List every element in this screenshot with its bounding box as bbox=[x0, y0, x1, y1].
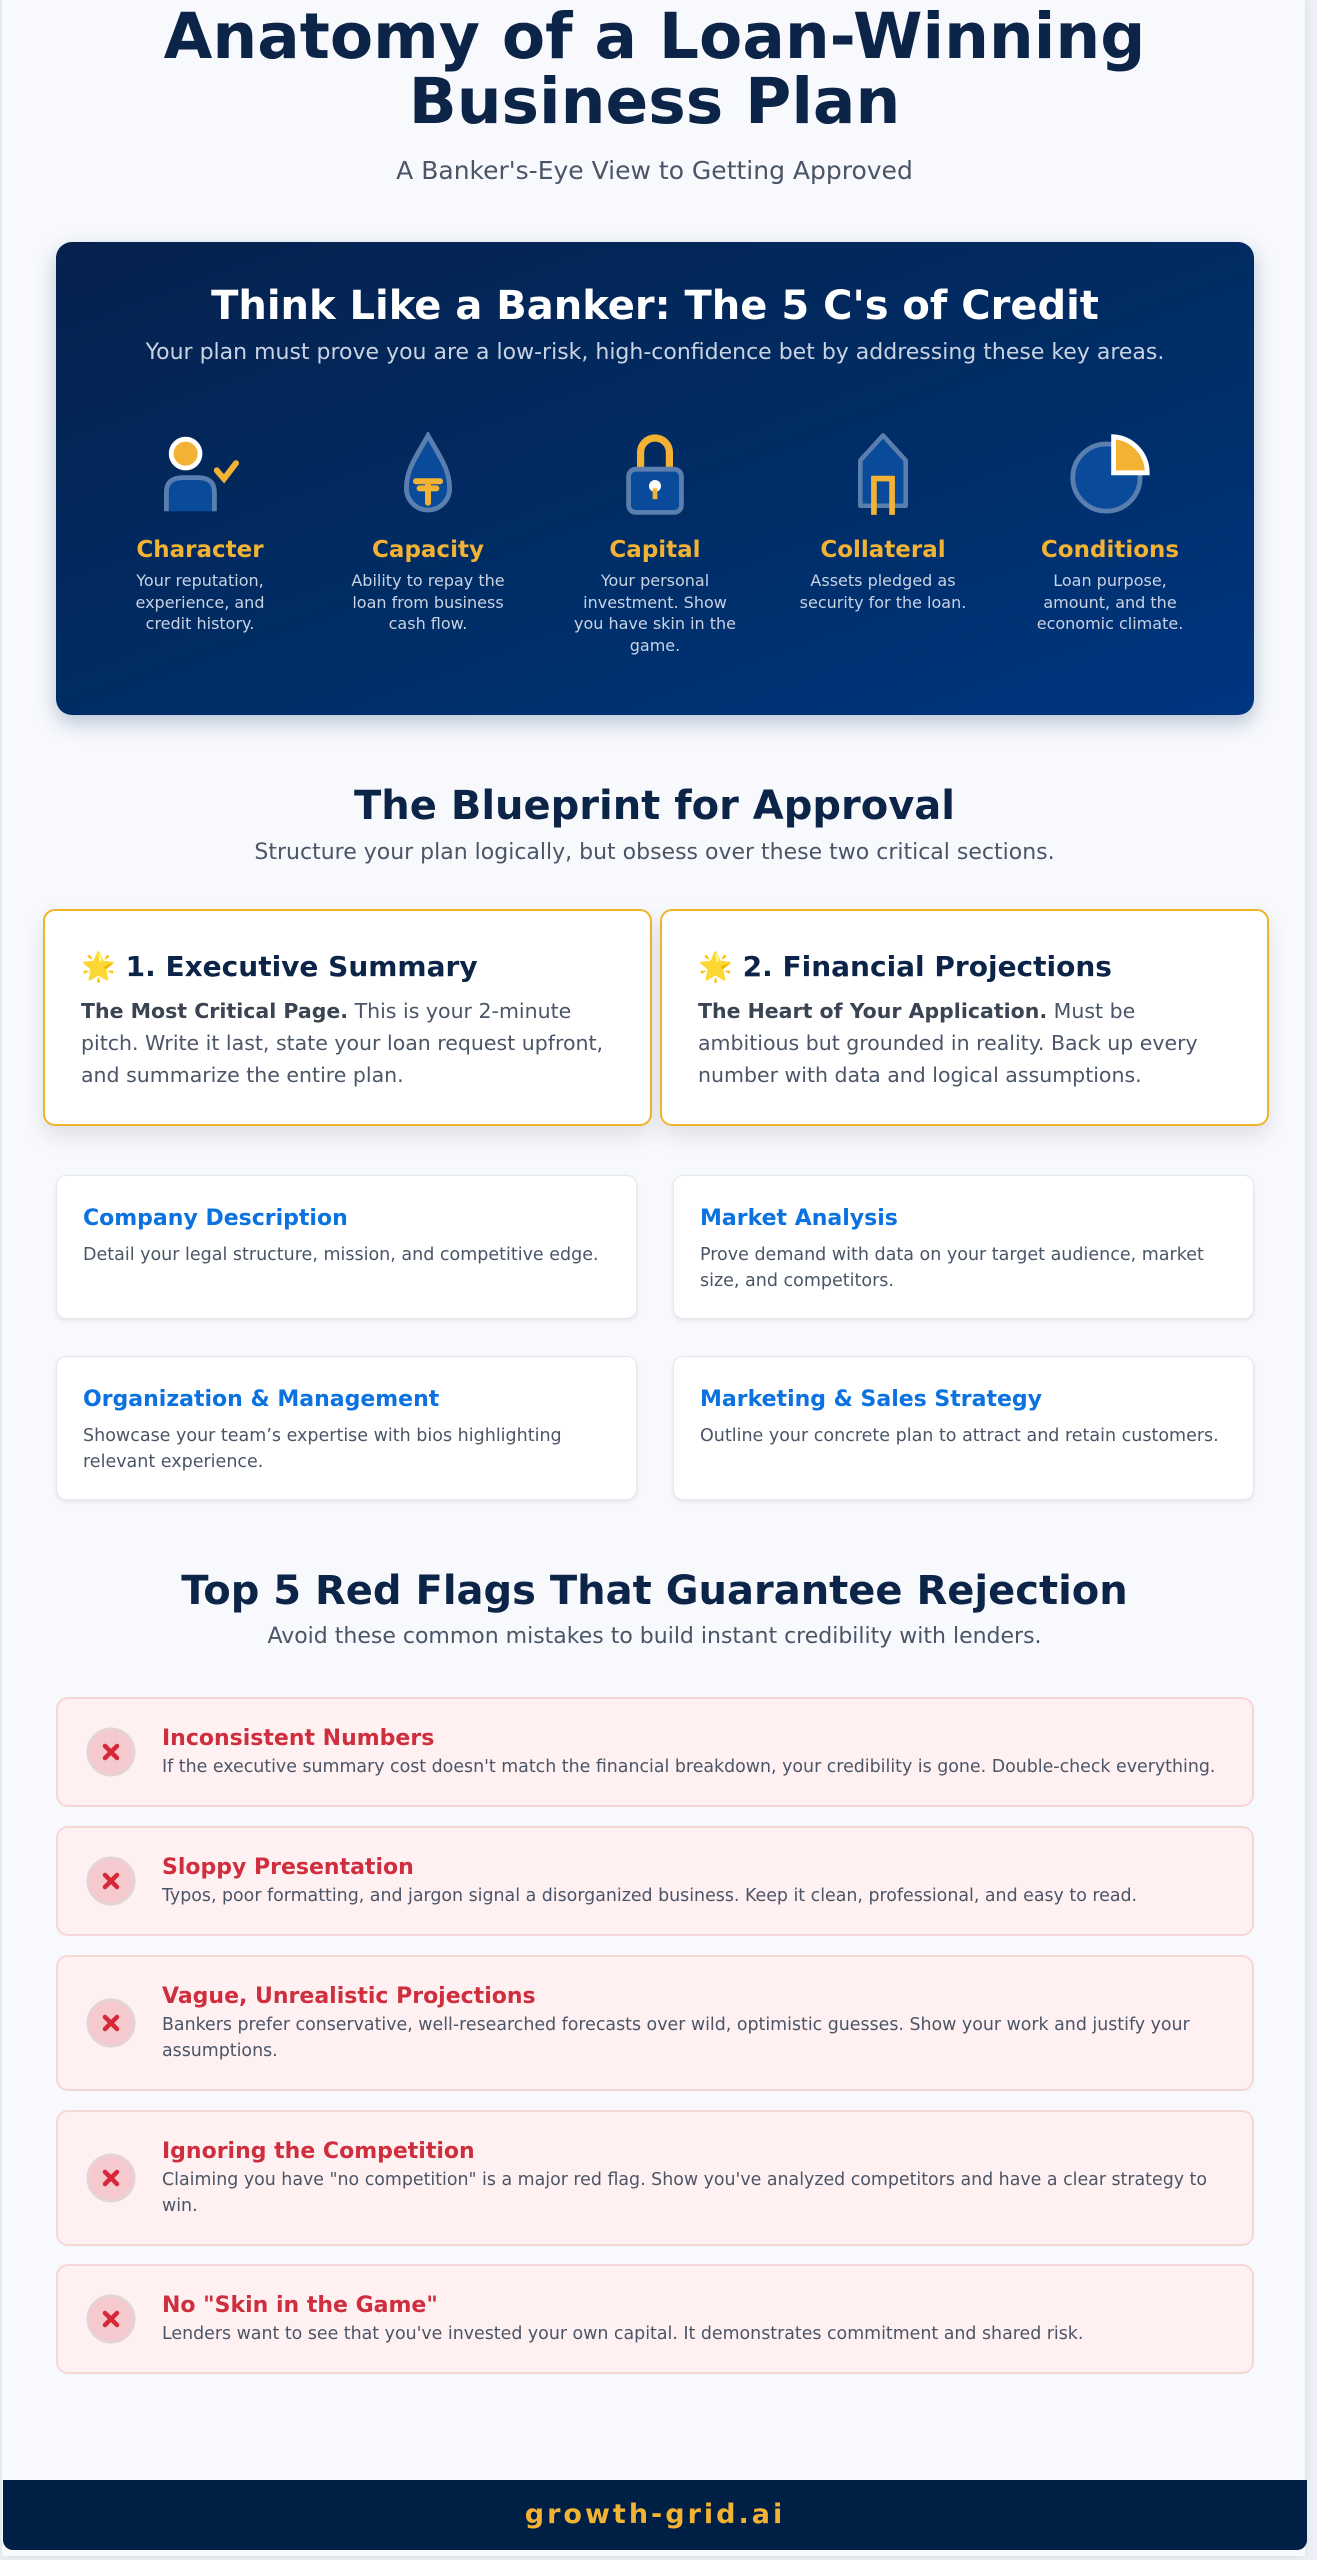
item: Character bbox=[136, 436, 264, 633]
icon: pie chart bbox=[1070, 434, 1150, 514]
red flag 2 bbox=[56, 1826, 1254, 1936]
card: company description: Company Description bbox=[83, 1206, 348, 1231]
panel heading: Think Like a Banker: The 5 C's of Credit bbox=[211, 283, 1099, 329]
icon: person check bbox=[164, 436, 239, 512]
item: Character: Your reputation, experience, and credit history. bbox=[136, 571, 264, 633]
item: Collateral bbox=[800, 433, 966, 612]
red flag 5: No "Skin in the Game" bbox=[162, 2293, 438, 2318]
card: marketing: Outline your concrete plan to attract and retain customers. bbox=[700, 1426, 1219, 1446]
title bbox=[164, 0, 1145, 138]
card: financial projections: The Heart of Your Application. Must be ambitious but grounded in reality. Back up every number with data and logical assumptions. bbox=[698, 999, 1198, 1087]
card: company description bbox=[56, 1175, 637, 1319]
icon: house bbox=[858, 433, 908, 515]
card: executive summary: The Most Critical Page. This is your 2-minute pitch. Write it last, state your loan request upfront, and summarize the entire plan. bbox=[81, 999, 603, 1087]
item: Collateral: Assets pledged as security for the loan. bbox=[800, 571, 966, 612]
item: Capital bbox=[574, 434, 736, 654]
title: Business Plan bbox=[409, 65, 900, 138]
icon: drop with coin bbox=[404, 432, 452, 512]
card: organization: Showcase your team’s expertise with bios highlighting relevant experience. bbox=[83, 1426, 562, 1472]
card: executive summary: 🌟 1. Executive Summary bbox=[81, 950, 478, 983]
title: Anatomy of a Loan-Winning bbox=[164, 0, 1145, 73]
subtitle: A Banker's-Eye View to Getting Approved bbox=[396, 156, 913, 185]
red flag 2: Typos, poor formatting, and jargon signal a disorganized business. Keep it clean, professional, and easy to read. bbox=[162, 1886, 1137, 1906]
card: marketing bbox=[673, 1356, 1254, 1500]
red flag 5: Lenders want to see that you've invested your own capital. It demonstrates commitment and shared risk. bbox=[162, 2324, 1083, 2344]
card: organization: Organization & Management bbox=[83, 1387, 439, 1412]
card: organization bbox=[56, 1356, 637, 1500]
red flag 4: Ignoring the Competition bbox=[162, 2139, 475, 2164]
red flag 1 bbox=[56, 1697, 1254, 1807]
item: Capital: Your personal investment. Show you have skin in the game. bbox=[574, 571, 736, 654]
card: market analysis: Market Analysis bbox=[700, 1206, 898, 1231]
item: Capital: Capital bbox=[609, 537, 701, 563]
red flag 4 bbox=[56, 2110, 1254, 2246]
red flag 1: Inconsistent Numbers bbox=[162, 1726, 434, 1751]
card: market analysis bbox=[673, 1175, 1254, 1319]
red flag 3: Bankers prefer conservative, well-researched forecasts over wild, optimistic guesses. Show your work and justify your assumptions. bbox=[162, 2015, 1190, 2061]
card: executive summary bbox=[43, 909, 652, 1126]
card: market analysis: Prove demand with data on your target audience, market size, and competitors. bbox=[700, 1245, 1204, 1291]
section heading: blueprint: The Blueprint for Approval bbox=[354, 783, 955, 829]
section heading: red flags: Top 5 Red Flags That Guarantee Rejection bbox=[181, 1568, 1128, 1614]
footer bbox=[3, 2480, 1307, 2550]
item: Capacity: Ability to repay the loan from business cash flow. bbox=[351, 571, 505, 633]
red flag 3 bbox=[56, 1955, 1254, 2091]
card: financial projections bbox=[660, 909, 1269, 1126]
card: financial projections: 🌟 2. Financial Projections bbox=[698, 950, 1112, 983]
card: marketing: Marketing & Sales Strategy bbox=[700, 1387, 1042, 1412]
item: Collateral: Collateral bbox=[820, 537, 946, 563]
panel subheading: Your plan must prove you are a low-risk, high-confidence bet by addressing these key areas. bbox=[146, 340, 1164, 365]
item: Conditions: Conditions bbox=[1041, 537, 1179, 563]
item: Capacity: Capacity bbox=[372, 537, 484, 563]
red flag 5 bbox=[56, 2264, 1254, 2374]
red flag 4: Claiming you have "no competition" is a major red flag. Show you've analyzed competitors and have a clear strategy to win. bbox=[162, 2170, 1207, 2216]
section subheading: Avoid these common mistakes to build instant credibility with lenders. bbox=[267, 1624, 1042, 1649]
icon: padlock bbox=[626, 434, 684, 515]
item: Conditions bbox=[1037, 434, 1183, 633]
red flag 1: If the executive summary cost doesn't match the financial breakdown, your credibility is gone. Double-check everything. bbox=[162, 1757, 1215, 1777]
section subheading: Structure your plan logically, but obsess over these two critical sections. bbox=[254, 840, 1055, 865]
red flag 3: Vague, Unrealistic Projections bbox=[162, 1984, 536, 2009]
card: company description: Detail your legal structure, mission, and competitive edge. bbox=[83, 1245, 599, 1265]
item: Conditions: Loan purpose, amount, and the economic climate. bbox=[1037, 571, 1183, 633]
footer: growth-grid.ai bbox=[525, 2499, 785, 2530]
panel: 5 C's of credit bbox=[56, 242, 1254, 715]
item: Capacity bbox=[351, 432, 505, 633]
red flag 2: Sloppy Presentation bbox=[162, 1855, 414, 1880]
item: Character: Character bbox=[136, 537, 264, 563]
